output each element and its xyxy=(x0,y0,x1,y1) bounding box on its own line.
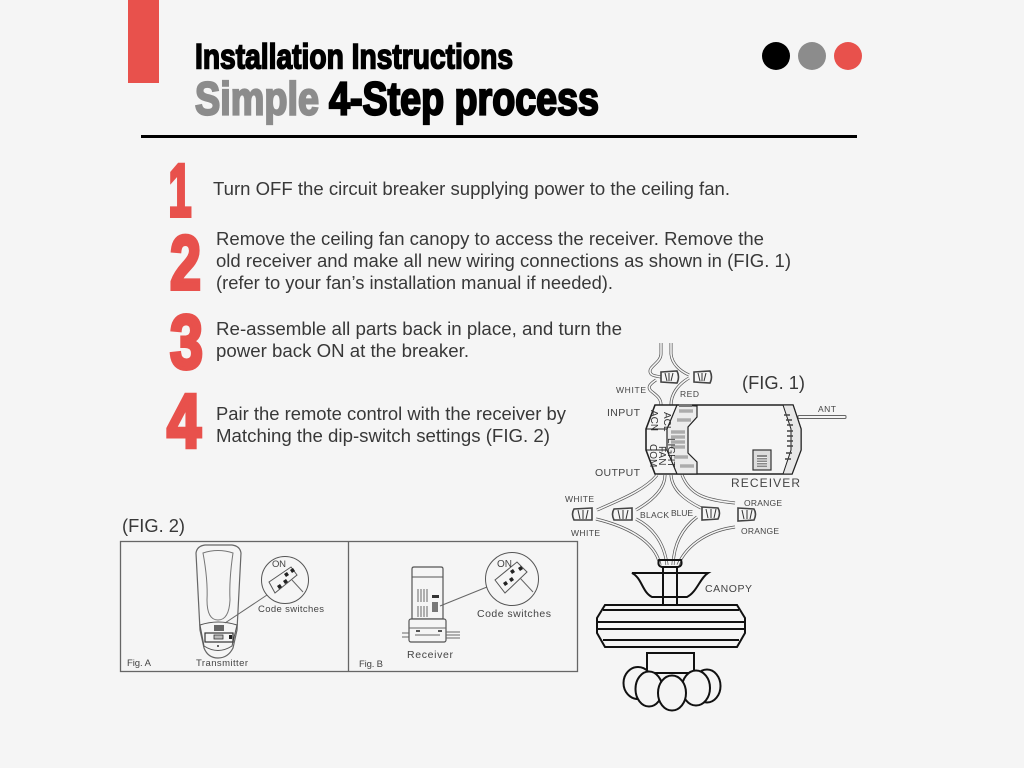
wire labels: WHITE xyxy=(616,385,646,395)
fig A: transmitter xyxy=(127,545,324,669)
wire labels: WHITE xyxy=(571,528,600,538)
wire labels: RECEIVER xyxy=(731,476,800,490)
subtitle: simple 4-step process xyxy=(195,72,599,124)
code switches callout: ON xyxy=(272,559,286,570)
terminal labels: ACL xyxy=(661,412,672,432)
red corner accent bar xyxy=(128,0,159,83)
step 3 text xyxy=(216,319,622,361)
three status dots xyxy=(762,42,862,70)
step 2 number: 2 xyxy=(170,221,201,306)
step 4 xyxy=(167,379,566,464)
fig B label: Fig. B xyxy=(359,659,383,670)
step 4 text: Matching the dip-switch settings (FIG. 2) xyxy=(216,426,550,446)
code switches label: Code switches xyxy=(477,608,551,620)
antenna wire xyxy=(798,416,846,418)
step 1 number: 1 xyxy=(168,149,192,232)
wire labels: RED xyxy=(680,389,699,399)
wire labels: OUTPUT xyxy=(595,467,641,479)
step 2 text: old receiver and make all new wiring connections as shown in (FIG. 1) xyxy=(216,251,791,271)
code switches callout xyxy=(225,556,308,623)
wire labels: ANT xyxy=(818,404,836,414)
wire labels: ORANGE xyxy=(744,498,782,508)
terminal labels: COM xyxy=(647,444,658,467)
title: installation instructions: Installation Instructions xyxy=(195,38,513,76)
step 4 number: 4 xyxy=(167,379,201,464)
receiver module xyxy=(402,567,460,642)
fan motor housing xyxy=(597,605,745,647)
code switches callout: ON xyxy=(497,559,512,570)
ceiling fan drawing xyxy=(597,560,752,710)
wire labels: ORANGE xyxy=(741,526,779,536)
wire labels xyxy=(565,385,836,538)
wire labels: BLACK xyxy=(640,510,669,520)
step 2 text: (refer to your fan’s installation manual if needed). xyxy=(216,273,613,293)
input wires xyxy=(649,343,689,405)
step 4 text xyxy=(216,404,566,446)
step 3 number: 3 xyxy=(170,300,203,385)
wire labels: BLUE xyxy=(671,508,693,518)
step 2 text: Remove the ceiling fan canopy to access the receiver. Remove the xyxy=(216,229,764,249)
terminal labels: LIGHT xyxy=(665,438,676,467)
FIG. 1 caption: (FIG. 1) xyxy=(742,373,805,393)
step 3 text: power back ON at the breaker. xyxy=(216,341,469,361)
transmitter remote xyxy=(196,545,241,658)
terminal labels: FAN xyxy=(656,446,667,465)
step 2 xyxy=(170,221,791,306)
transmitter label: Transmitter xyxy=(196,658,248,669)
step 1 xyxy=(168,149,730,232)
canopy xyxy=(632,560,708,604)
fig B: receiver xyxy=(359,552,551,670)
code switches callout xyxy=(440,552,538,606)
wire labels: WHITE xyxy=(565,494,594,504)
canopy label: CANOPY xyxy=(705,583,752,595)
subtitle: simple 4-step process: Simple xyxy=(195,72,319,124)
step 3 text: Re-assemble all parts back in place, and turn the xyxy=(216,319,622,339)
subtitle: simple 4-step process: 4-Step process xyxy=(329,72,599,124)
step 1 text: Turn OFF the circuit breaker supplying power to the ceiling fan. xyxy=(213,179,730,199)
receiver housing xyxy=(646,404,801,474)
fig A label: Fig. A xyxy=(127,658,152,669)
input wire connectors xyxy=(661,371,712,383)
wire labels: INPUT xyxy=(607,407,641,419)
terminal labels xyxy=(647,410,676,467)
receiver label: Receiver xyxy=(407,649,454,661)
light kit xyxy=(624,653,720,710)
FIG. 2 caption: (FIG. 2) xyxy=(122,516,185,536)
step 2 text xyxy=(216,229,791,293)
output wires xyxy=(596,475,735,565)
output wire connectors xyxy=(572,507,756,521)
step 4 text: Pair the remote control with the receiver by xyxy=(216,404,566,424)
wiring diagram: figure 1 xyxy=(565,343,846,710)
terminal labels: ACN xyxy=(648,410,659,431)
code switches label: Code switches xyxy=(258,604,324,615)
figure 2 panel xyxy=(120,541,578,672)
step 3 xyxy=(170,300,622,385)
